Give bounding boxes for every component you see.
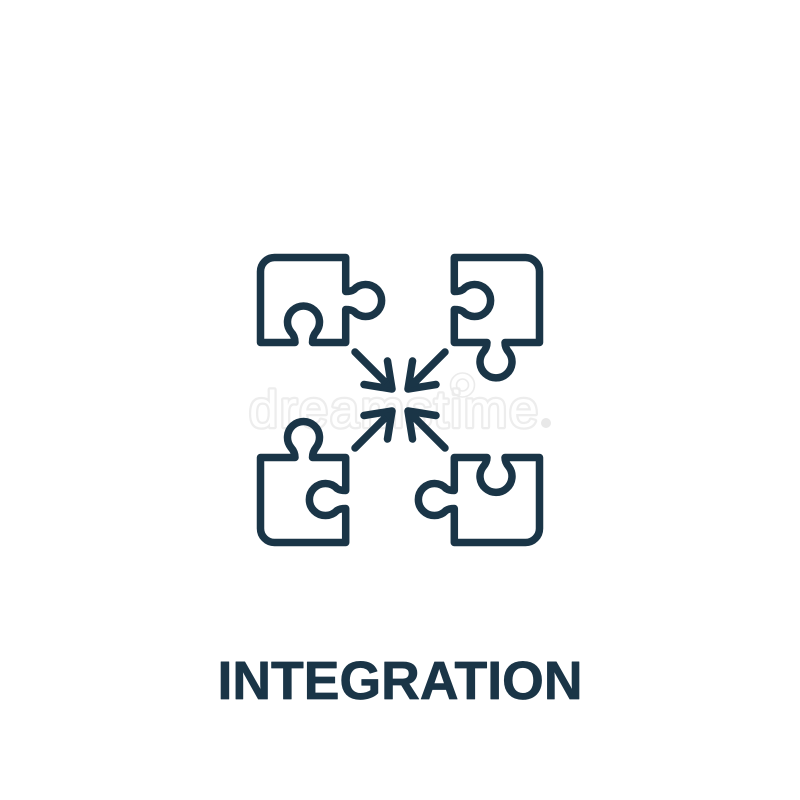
- icon: puzzle piece bottom right: [418, 458, 540, 542]
- watermark: dreamstime: [249, 381, 538, 439]
- icon: puzzle piece top right: [454, 258, 540, 378]
- arrow: bottom left: [355, 410, 394, 448]
- arrow: top left: [355, 352, 394, 390]
- arrow: bottom right: [406, 410, 445, 448]
- title: INTEGRATION: [218, 651, 582, 711]
- arrow: top right: [406, 352, 445, 390]
- icon: puzzle piece bottom left: [260, 422, 346, 542]
- icon: puzzle piece top left: [260, 258, 382, 342]
- icon: four puzzle pieces with converging arrows: [260, 258, 540, 542]
